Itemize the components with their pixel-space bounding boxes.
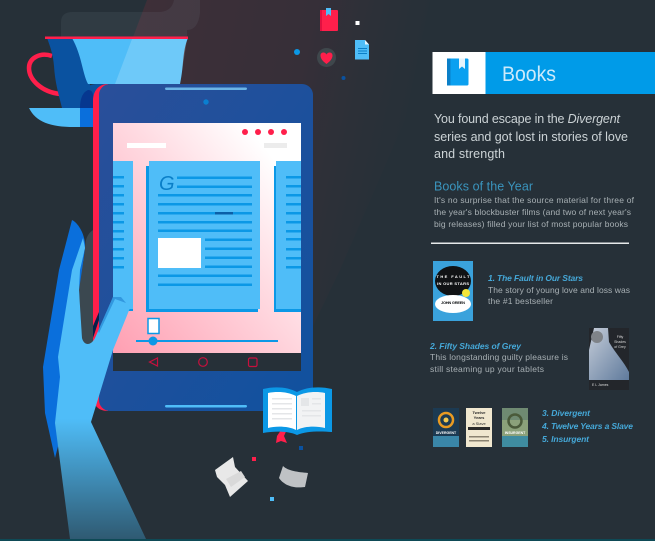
book cover: fifty shades of grey: Fifty <box>617 335 624 339</box>
camera <box>203 99 209 105</box>
book 2 text <box>429 341 568 374</box>
book cover: the fault in our stars <box>433 261 473 321</box>
books of the year: the year's blockbuster films (and two of next year's <box>434 207 631 217</box>
drop cap: G <box>159 173 175 195</box>
header bars <box>127 143 166 148</box>
light beam <box>113 0 430 353</box>
book cover: twelve years a slave: a Slave <box>472 421 486 426</box>
center page <box>146 161 260 312</box>
intro text <box>434 112 628 161</box>
intro text: You found escape in the Divergent <box>434 112 621 126</box>
book cover: divergent: DIVERGENT <box>436 431 457 435</box>
books of the year: big releases) filled your list of most popular books <box>434 219 628 229</box>
book cover: the fault in our stars: IN OUR STARS <box>437 281 469 286</box>
hand <box>43 220 146 539</box>
ribbon <box>276 427 288 443</box>
intro text: series and got lost in stories of love <box>434 130 628 144</box>
icon: document <box>355 40 369 60</box>
loose paper grey <box>279 466 308 487</box>
cup body <box>47 38 90 108</box>
book cover: insurgent <box>502 408 528 447</box>
book cover: twelve years a slave: Twelve <box>472 410 486 415</box>
tablet back edge <box>93 84 108 411</box>
menu dots <box>242 129 287 135</box>
books 3 to 5 list <box>541 408 633 444</box>
hand and wrist <box>55 238 146 539</box>
tablet <box>93 84 313 411</box>
right page <box>274 161 301 312</box>
speakers <box>165 88 247 90</box>
image placeholder <box>158 238 201 268</box>
open book icon <box>263 387 332 443</box>
saucer <box>29 108 82 127</box>
section header: books <box>432 52 655 94</box>
cup handle <box>29 55 60 94</box>
teacup <box>29 36 188 127</box>
book cover: fifty shades of grey: Shades <box>614 340 626 344</box>
page slider <box>136 318 278 346</box>
loose paper white <box>215 457 248 497</box>
book 1 text: the #1 bestseller <box>488 296 553 306</box>
book 2 text: This longstanding guilty pleasure is <box>430 352 568 362</box>
book cover: fifty shades of grey: of Grey <box>614 345 626 349</box>
finger shadow tip <box>93 312 99 338</box>
icon: heart <box>317 48 336 67</box>
books of the year: It's no surprise that the source material for three of <box>434 195 635 205</box>
back of hand <box>43 220 85 458</box>
book cover: twelve years a slave: Years <box>474 415 485 420</box>
left page <box>113 161 133 311</box>
cup highlight <box>72 38 188 84</box>
icon: small dot <box>342 76 346 80</box>
book cover: the fault in our stars: JOHN GREEN <box>441 300 465 305</box>
books 3 to 5 list: 5. Insurgent <box>542 434 590 444</box>
navigation bar <box>113 353 301 371</box>
book 2 text: still steaming up your tablets <box>430 364 544 374</box>
book cover: twelve years a slave <box>466 408 492 447</box>
book cover: insurgent: INSURGENT <box>505 431 526 435</box>
intro text: and strength <box>434 147 505 161</box>
books 3 to 5 list: 4. Twelve Years a Slave <box>541 421 633 431</box>
heading: Books <box>502 63 556 86</box>
divider <box>431 242 629 244</box>
books of the year: Books of the Year <box>434 180 533 194</box>
book 1 text: The story of young love and loss was <box>488 285 630 295</box>
tablet body <box>99 84 313 411</box>
cup overlap <box>80 84 110 108</box>
book cover: fifty shades of grey <box>589 328 629 390</box>
screen <box>113 123 301 353</box>
confetti squares <box>252 446 303 501</box>
book 2 text: 2. Fifty Shades of Grey <box>429 341 522 351</box>
beam on cup <box>115 39 187 84</box>
finger shadow <box>79 230 93 344</box>
pages <box>268 392 296 430</box>
books of the year <box>434 180 635 229</box>
icon: blue dot <box>294 49 300 55</box>
icon: blue book <box>447 58 468 86</box>
steam <box>61 0 200 39</box>
cover <box>263 387 332 435</box>
book cover: the fault in our stars: THE FAULT <box>436 274 470 279</box>
icon: red book <box>320 8 338 31</box>
book cover: divergent <box>433 408 459 447</box>
book 1 text <box>488 273 630 306</box>
book cover: fifty shades of grey: E L James <box>592 383 609 387</box>
book 1 text: 1. The Fault in Our Stars <box>488 273 583 283</box>
icon: white square <box>356 21 360 25</box>
thumb highlight <box>98 297 126 333</box>
books 3 to 5 list: 3. Divergent <box>542 408 591 418</box>
cup rim <box>45 36 188 39</box>
